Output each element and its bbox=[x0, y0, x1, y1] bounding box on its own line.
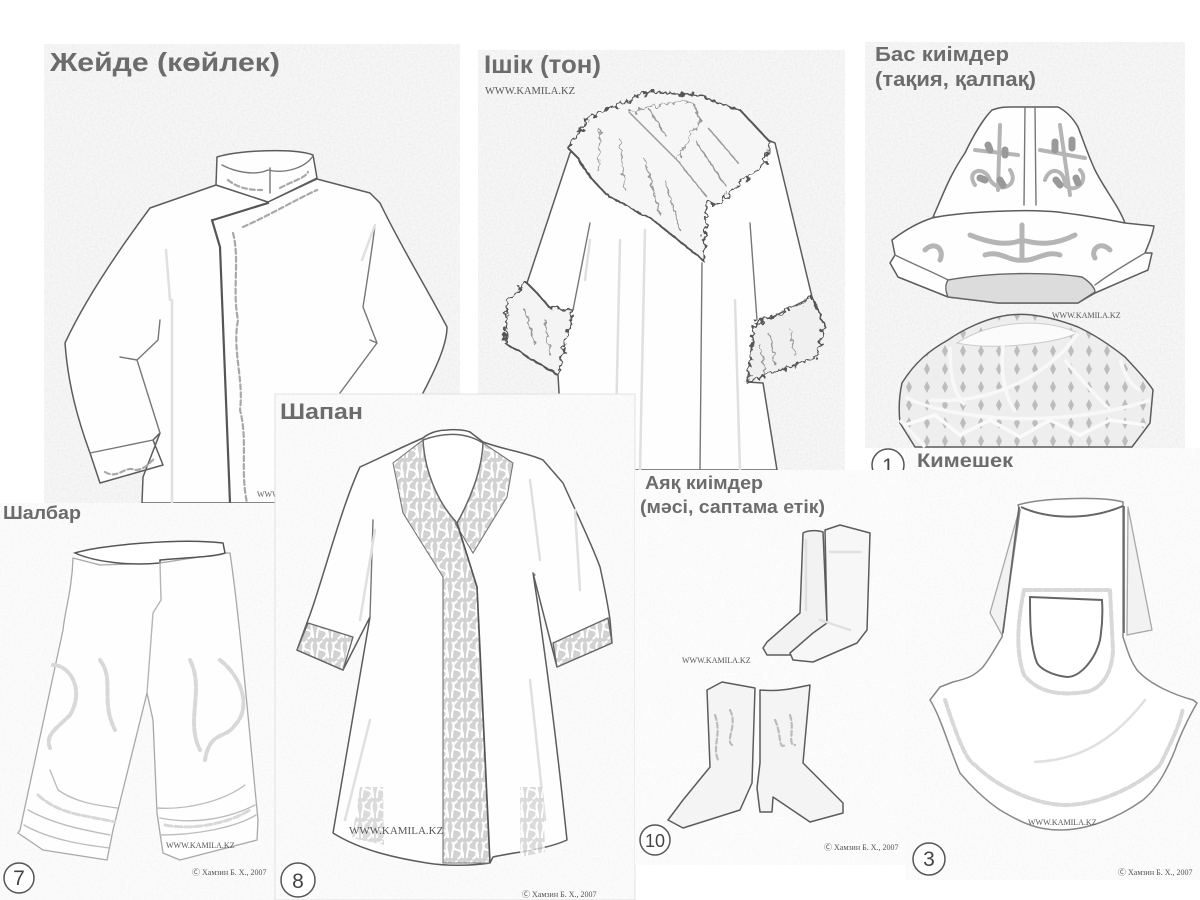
illustration: saptama boots bbox=[668, 682, 843, 828]
illustration: shapan coat bbox=[297, 430, 612, 865]
watermark: WWW.KAMILA.KZ bbox=[349, 825, 444, 837]
panel: Жейде bbox=[44, 44, 460, 503]
number badge 10 bbox=[640, 825, 670, 855]
heading: Шалбар: Шалбар bbox=[3, 503, 81, 523]
number badge 3: 3 bbox=[923, 848, 935, 871]
credit: Ⓒ Хамзин Б. Х., 2007 bbox=[824, 843, 898, 852]
fur cuffs bbox=[505, 283, 825, 382]
heading: Аяқ киімдер: (мәсі, саптама етік) bbox=[640, 497, 825, 517]
illustration: masi boots bbox=[763, 525, 870, 662]
watermark: WWW.KAMILA.KZ bbox=[1052, 311, 1121, 320]
number badge 8 bbox=[281, 863, 315, 897]
collar and front band bbox=[393, 434, 513, 863]
number badge 3 bbox=[913, 843, 945, 875]
credit: Ⓒ Хамзин Б. Х., 2007 bbox=[1118, 868, 1192, 877]
heading: Бас киімдер: Бас киімдер bbox=[875, 44, 1009, 66]
watermark: WWW.KAMILA.KZ bbox=[166, 841, 235, 850]
panel: Кимешек bbox=[905, 448, 1200, 880]
heading: Кимешек: Кимешек bbox=[917, 451, 1014, 472]
cuffs bbox=[297, 618, 612, 670]
hem ornaments bbox=[352, 787, 545, 857]
heading: Аяқ киімдер: Аяқ киімдер bbox=[645, 473, 763, 493]
number badge 7 bbox=[4, 863, 34, 893]
watermark: WWW.KAMILA.KZ bbox=[485, 86, 575, 97]
number badge 10: 10 bbox=[645, 831, 665, 851]
watermark: WWW bbox=[257, 490, 280, 499]
heading: Бас киімдер bbox=[875, 44, 1036, 91]
illustration: fur coat bbox=[505, 92, 825, 470]
illustration: shirt bbox=[65, 151, 447, 503]
watermark: WWW.KAMILA.KZ bbox=[682, 656, 751, 665]
heading: Аяқ киімдер bbox=[640, 473, 825, 517]
number badge 8: 8 bbox=[292, 870, 304, 893]
illustration: trousers bbox=[18, 541, 258, 860]
panel: Шалбар bbox=[0, 503, 280, 900]
number badge 1 bbox=[872, 449, 904, 481]
panel: Аяқ киімдер bbox=[635, 470, 905, 865]
illustration: takiya bbox=[899, 314, 1153, 447]
illustration: kalpak bbox=[890, 107, 1154, 303]
panel: Бас киімдер bbox=[865, 42, 1185, 448]
heading: Бас киімдер: (тақия, қалпақ) bbox=[875, 69, 1036, 91]
panel: Шапан bbox=[275, 394, 635, 900]
fur collar bbox=[568, 92, 770, 260]
heading: Ішік: Ішік (тон) bbox=[484, 51, 601, 79]
illustration: kimeshek bbox=[930, 498, 1197, 830]
heading: Шапан: Шапан bbox=[280, 399, 363, 424]
watermark: WWW.KAMILA.KZ bbox=[1028, 818, 1097, 827]
ornaments on kalpak bbox=[925, 125, 1110, 260]
heading: Жейде: Жейде (көйлек) bbox=[49, 47, 280, 77]
credit: Ⓒ Хамзин Б. Х., 2007 bbox=[192, 868, 266, 877]
number badge 1: 1 bbox=[882, 455, 894, 478]
panel: Ішік bbox=[478, 50, 845, 470]
number badge 7: 7 bbox=[13, 867, 25, 890]
credit: Ⓒ Хамзин Б. Х., 2007 bbox=[522, 890, 596, 899]
